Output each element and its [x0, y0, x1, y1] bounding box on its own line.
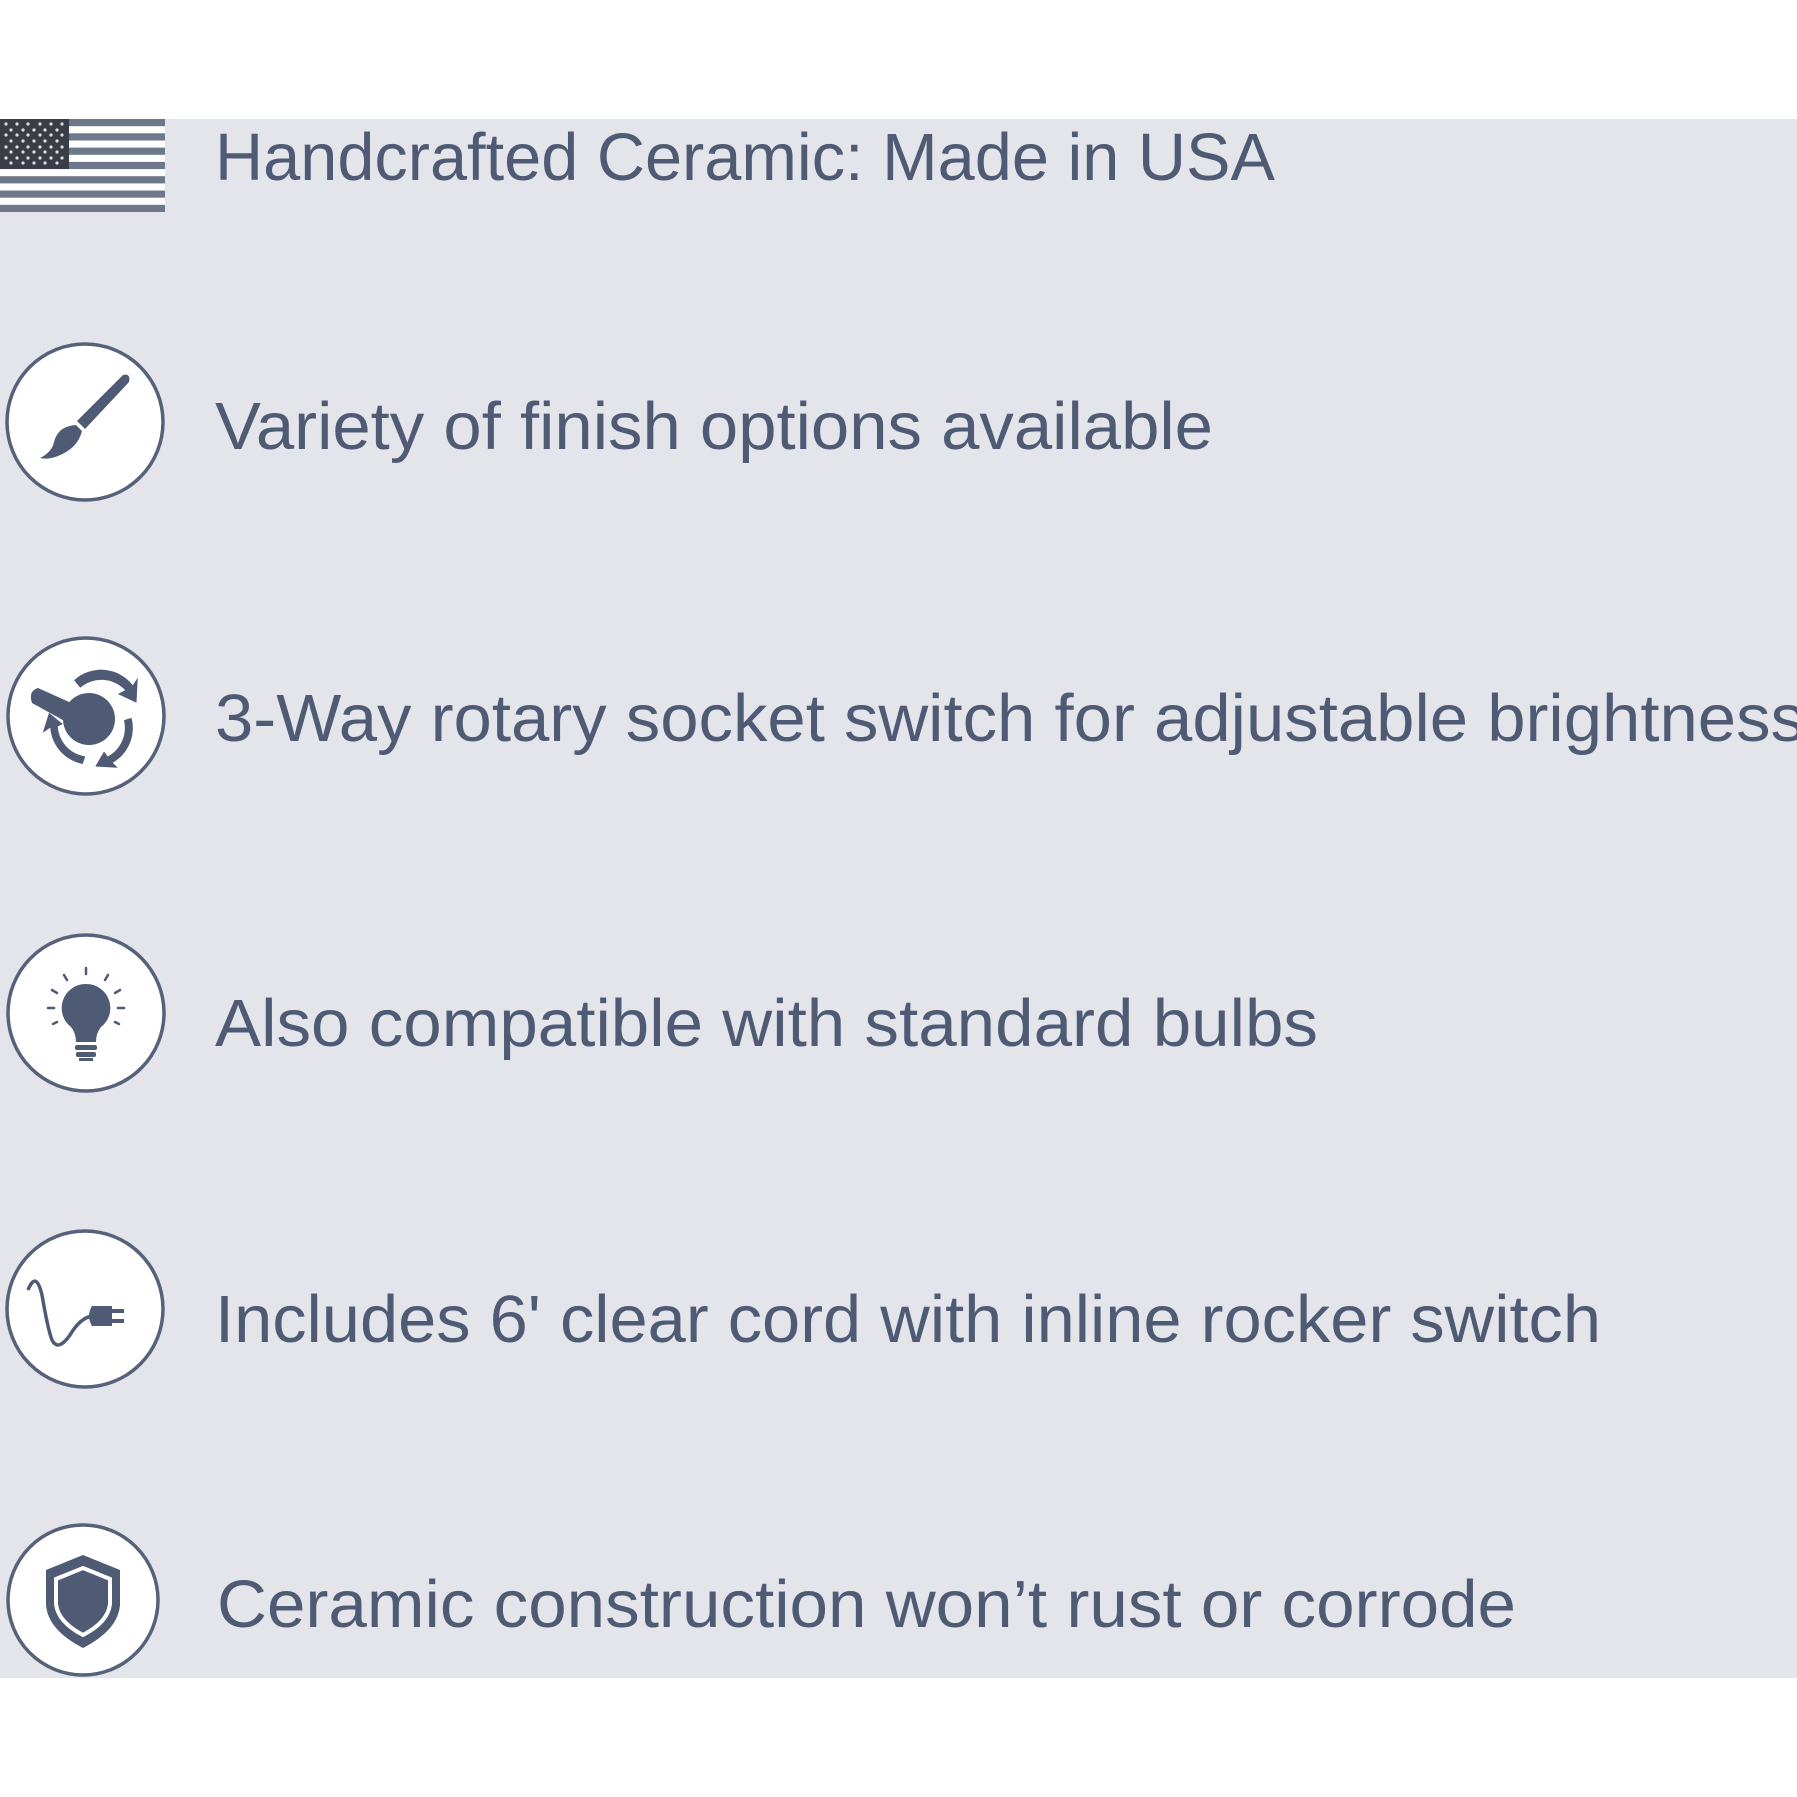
icon: shield: [8, 1525, 158, 1675]
text: rotary switch: 3-Way rotary socket switch for adjustable brightness: [215, 681, 1797, 756]
text: standard bulbs: Also compatible with standard bulbs: [215, 986, 1318, 1061]
text: cord: Includes 6' clear cord with inline rocker switch: [215, 1282, 1601, 1357]
icon: paintbrush: [7, 344, 163, 500]
text: made in USA: Handcrafted Ceramic: Made in USA: [215, 120, 1275, 195]
icon: US flag: [0, 119, 165, 212]
icon: light bulb: [8, 935, 164, 1091]
text: ceramic construction: Ceramic construction won’t rust or corrode: [217, 1567, 1516, 1642]
icon: rotary switch: [8, 638, 164, 794]
icon: cord and plug: [7, 1231, 163, 1387]
text: finish options: Variety of finish options available: [215, 389, 1213, 464]
